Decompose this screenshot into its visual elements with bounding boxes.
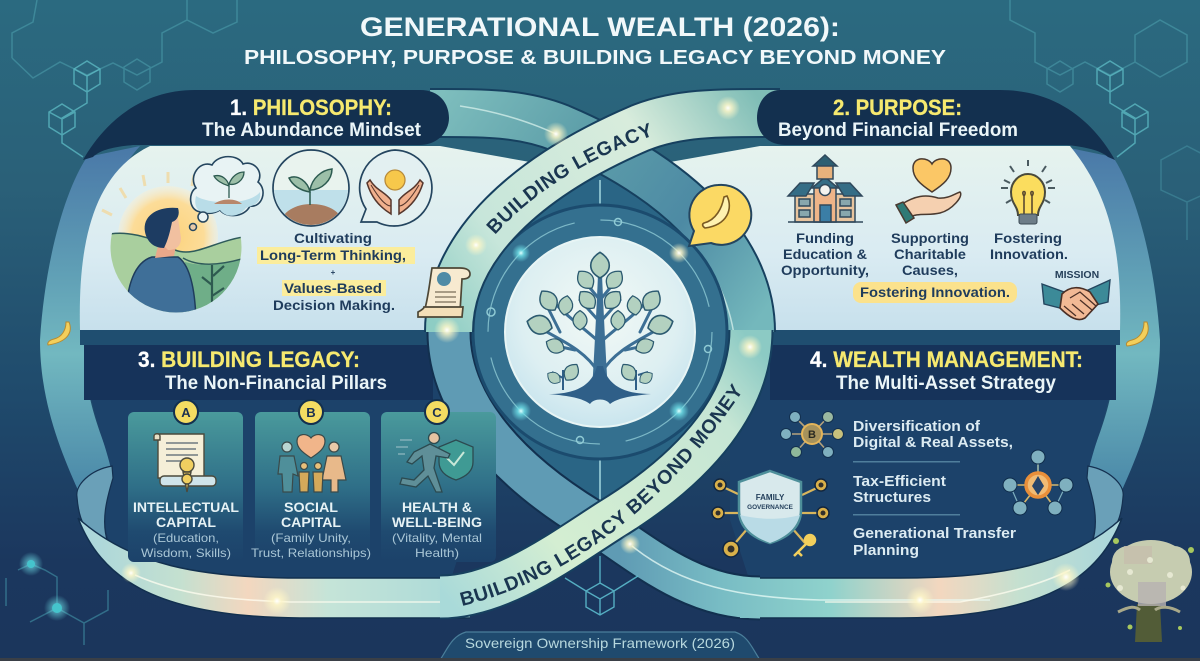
text block: purpose: Funding: [796, 230, 854, 246]
back ribbon streak: [460, 106, 735, 350]
icon: ethereum network: [1003, 450, 1073, 515]
text block: wealth management list: Planning: [853, 542, 919, 559]
ribbon text: building legacy beyond money: BUILDING LEGACY BEYOND MONEY: [460, 383, 740, 606]
card A: intellectual capital: CAPITAL: [156, 514, 216, 530]
icon: family governance shield: [712, 471, 829, 557]
text block: wealth management list: Digital & Real Assets,: [853, 434, 1013, 451]
centre disc: [505, 237, 695, 427]
text block: purpose: Education &: [783, 246, 867, 262]
icon: banana speech bubble: [689, 185, 751, 246]
lower left ribbon sweep: [78, 518, 470, 618]
icon: mission handshake: MISSION: [1055, 269, 1099, 281]
lower right sweep outline: [760, 518, 1122, 618]
icon: bitcoin network: [780, 412, 844, 458]
text block: purpose: Supporting: [891, 230, 969, 246]
text block: wealth management list: Generational Transfer: [853, 525, 1016, 542]
ring inner: [488, 220, 712, 444]
icon: scroll: [418, 268, 470, 317]
icon: family governance shield: FAMILY: [756, 493, 785, 502]
text block: purpose: Causes,: [902, 262, 958, 278]
card A: intellectual capital: INTELLECTUAL: [133, 499, 239, 515]
lower left sweep outline: [78, 518, 470, 618]
panel 1: philosophy: [80, 146, 575, 330]
icon: school: [788, 155, 863, 222]
icon: mission handshake: [1042, 269, 1110, 320]
heading 1: [202, 95, 422, 141]
panel 3: building legacy background: [84, 332, 470, 582]
heading 2: [778, 95, 1018, 141]
lower band streak right: [632, 546, 990, 600]
icon: thought cloud: [190, 157, 263, 230]
text block: wealth management list: Structures: [853, 489, 931, 506]
title: PHILOSOPHY, PURPOSE & BUILDING LEGACY BEYOND MONEY: [244, 47, 947, 69]
heading 1: The Abundance Mindset: [202, 120, 422, 141]
header pill 1: [83, 90, 449, 160]
footer label: Sovereign Ownership Framework (2026): [465, 635, 735, 651]
right outer ribbon: [1060, 146, 1160, 490]
badge A: A: [181, 405, 191, 420]
icon: sprout circle: [272, 150, 350, 230]
text block: philosophy: Decision Making.: [273, 297, 395, 313]
lower right ribbon sweep: [740, 518, 1122, 618]
icon: hands and sun bubble: [360, 150, 432, 226]
icon: diploma scroll: [154, 434, 216, 492]
ribbon text: building legacy: BUILDING LEGACY: [486, 122, 649, 234]
card B: social capital: CAPITAL: [281, 514, 341, 530]
icon: family governance shield: GOVERNANCE: [747, 504, 794, 511]
ribbon: beyond money: [440, 330, 751, 597]
header band 4: [770, 345, 1116, 400]
text block: purpose: Fostering: [994, 230, 1062, 246]
icon: central tree: [525, 252, 675, 404]
icon: small banana left: [48, 322, 70, 345]
card B: social capital: SOCIAL: [284, 499, 338, 515]
card A: intellectual capital: (Education,: [153, 531, 219, 545]
text block: purpose: Opportunity,: [781, 262, 869, 278]
centre diamond backdrop: [428, 140, 772, 530]
heading 4: The Multi-Asset Strategy: [836, 373, 1056, 394]
ribbon: beyond money fill: [440, 330, 751, 597]
left outer ribbon: [40, 146, 140, 490]
title: GENERATIONAL WEALTH (2026):: [360, 12, 840, 42]
text block: purpose: [781, 230, 1068, 303]
text block: wealth management list: [853, 418, 1016, 559]
icon: money tree: [1106, 538, 1194, 642]
text block: philosophy: Cultivating: [294, 230, 372, 246]
lower right ribbon fill: [449, 332, 760, 598]
card C: health and well-being: Health): [415, 546, 459, 560]
ring: [473, 205, 727, 459]
card B: social capital: Trust, Relationships): [251, 546, 371, 560]
card B: social capital: [251, 412, 371, 562]
bottom edge: [0, 658, 1200, 661]
heading 3: The Non-Financial Pillars: [165, 373, 387, 394]
icon: chain cube: [565, 556, 638, 615]
icon: man looking at sunrise: [102, 172, 250, 320]
lower band streak left: [135, 575, 440, 602]
badge B: B: [306, 405, 316, 420]
glowing nodes bottom left: [19, 552, 70, 621]
text block: purpose: Charitable: [894, 246, 966, 262]
card B: social capital: (Family Unity,: [271, 531, 351, 545]
centre cross lines: [599, 180, 601, 510]
panel divider band left: [80, 330, 440, 345]
text block: purpose: Fostering Innovation.: [860, 284, 1010, 300]
badge A: [174, 400, 198, 424]
card C: health and well-being: HEALTH &: [402, 499, 472, 515]
network pattern bottom left: [6, 564, 108, 645]
heading 1: 1. PHILOSOPHY:: [230, 95, 392, 120]
text block: philosophy: [257, 230, 415, 313]
ribbon glow lights: [121, 96, 1080, 615]
card C: health and well-being: (Vitality, Mental: [392, 531, 482, 545]
upper ribbon back fill: [430, 113, 751, 332]
badge C: [425, 400, 449, 424]
card C: health and well-being: [381, 412, 496, 562]
panel divider band right: [760, 330, 1120, 345]
title: [244, 12, 947, 69]
header band 3: [84, 345, 433, 400]
badge B: [299, 400, 323, 424]
badge C: C: [432, 405, 442, 420]
lower right ribbon: [449, 332, 760, 598]
icon: light bulb: [1001, 160, 1055, 224]
text block: philosophy: Values-Based: [284, 280, 382, 296]
network pattern top left: [12, 0, 237, 157]
ribbon: building legacy fill: [449, 113, 780, 332]
text block: purpose: Innovation.: [990, 246, 1068, 262]
footer label: [440, 632, 760, 660]
heading 3: [138, 347, 387, 394]
ribbon: building legacy: [449, 113, 780, 332]
text block: philosophy: +: [331, 268, 336, 277]
upper ribbon back: [430, 113, 751, 332]
card C: health and well-being: WELL-BEING: [392, 514, 482, 530]
icon: heart in hand: [896, 159, 961, 223]
fold of right ribbon: [1087, 466, 1123, 543]
panel 4: wealth management background: [730, 332, 1116, 582]
icon: runner with shield: [396, 432, 473, 492]
text block: philosophy: Long-Term Thinking,: [260, 247, 406, 263]
heading 2: 2. PURPOSE:: [833, 95, 962, 120]
card A: intellectual capital: Wisdom, Skills): [141, 546, 231, 560]
network pattern top right: [1010, 0, 1200, 240]
panel 2: purpose: [625, 146, 1120, 330]
text block: wealth management list: Diversification of: [853, 418, 981, 435]
lower band streak right 2: [825, 570, 1070, 602]
heading 4: [810, 347, 1083, 394]
heading 3: 3. BUILDING LEGACY:: [138, 347, 360, 372]
icon: family with heart: [278, 435, 346, 492]
header pill 2: [757, 90, 1115, 160]
text block: wealth management list: Tax-Efficient: [853, 473, 946, 490]
fold of left ribbon: [77, 466, 113, 543]
ring nodes: [487, 218, 712, 444]
icon: small banana right: [1126, 322, 1148, 346]
heading 2: Beyond Financial Freedom: [778, 120, 1018, 141]
icon: bitcoin network: B: [808, 429, 816, 441]
card A: intellectual capital: [128, 412, 243, 562]
heading 4: 4. WEALTH MANAGEMENT:: [810, 347, 1083, 372]
